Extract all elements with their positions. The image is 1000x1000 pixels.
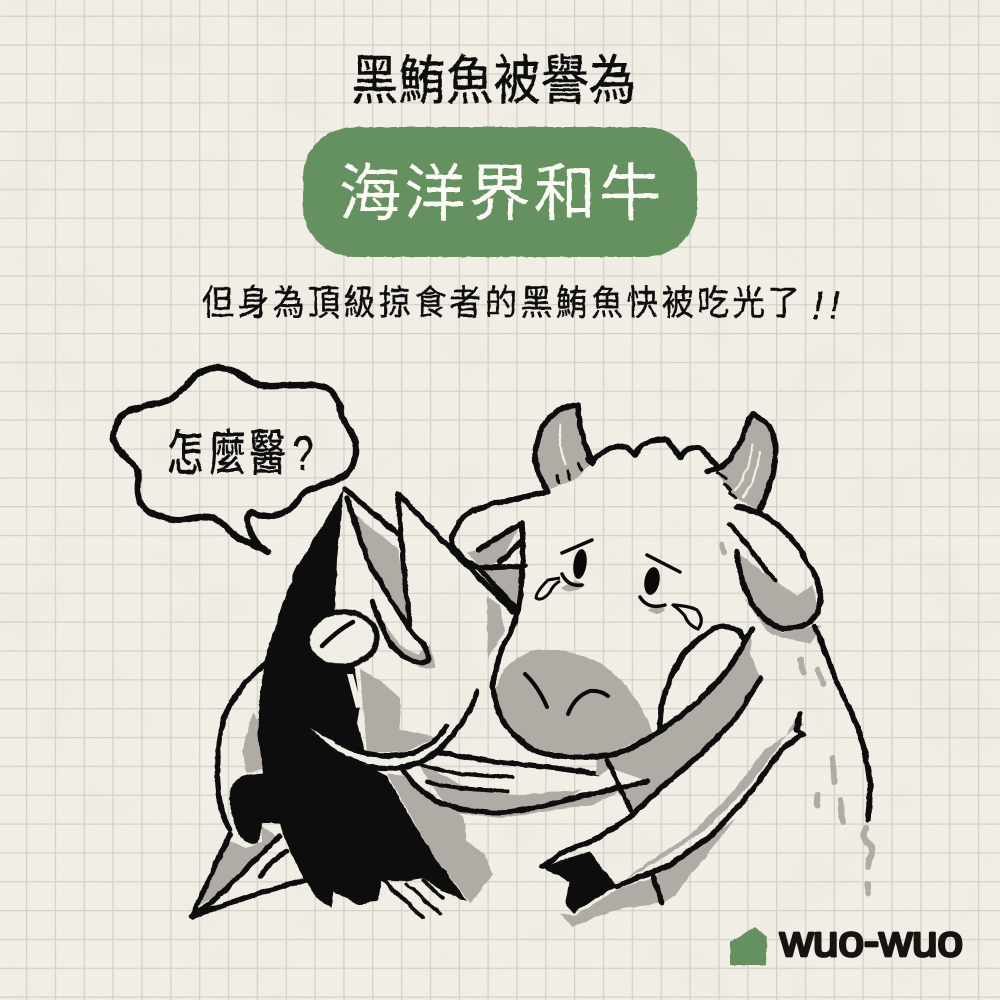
cow outlines (452, 405, 870, 903)
cow grey spots (722, 545, 873, 893)
speech bubble (114, 368, 356, 552)
tuna gill sliver (347, 674, 362, 708)
bubble text: 怎麼醫? (167, 427, 314, 481)
tuna black body (229, 487, 467, 908)
title: line one: 黑鮪魚被譽為 (351, 50, 636, 111)
left brow and lower lid (562, 540, 592, 585)
cow hoof (542, 851, 617, 913)
green pill background (303, 127, 697, 257)
right brow and lower lid (640, 555, 680, 606)
right eye (642, 566, 662, 596)
bubble outline (114, 368, 356, 552)
illustration: bluefin tuna (192, 487, 647, 917)
cow nostrils (525, 674, 608, 714)
logo: wordmark: wuo-wuo (779, 917, 963, 966)
tuna outlines and fins (192, 489, 647, 917)
cow grey shading (467, 404, 822, 927)
whisker tip over the arm (567, 768, 647, 800)
horn highlights (560, 424, 760, 497)
subtitle: 但身為頂級掠食者的黑鮪魚快被吃光了 (202, 284, 800, 323)
left eye (571, 548, 589, 580)
right tear (673, 605, 701, 629)
lower whisker edge (403, 769, 647, 813)
cow face details (525, 540, 701, 714)
left tear (536, 578, 560, 599)
tuna grey shading (200, 509, 640, 905)
tuna eye (305, 609, 379, 669)
tuna mouth crescent (310, 727, 447, 766)
logo: green house icon (730, 927, 767, 965)
logo (730, 917, 963, 966)
subtitle: !! (812, 284, 840, 328)
illustration: crying wagyu cow (403, 404, 873, 927)
pill text: 海洋界和牛 (339, 160, 661, 229)
title: green highlight pill (303, 127, 697, 257)
